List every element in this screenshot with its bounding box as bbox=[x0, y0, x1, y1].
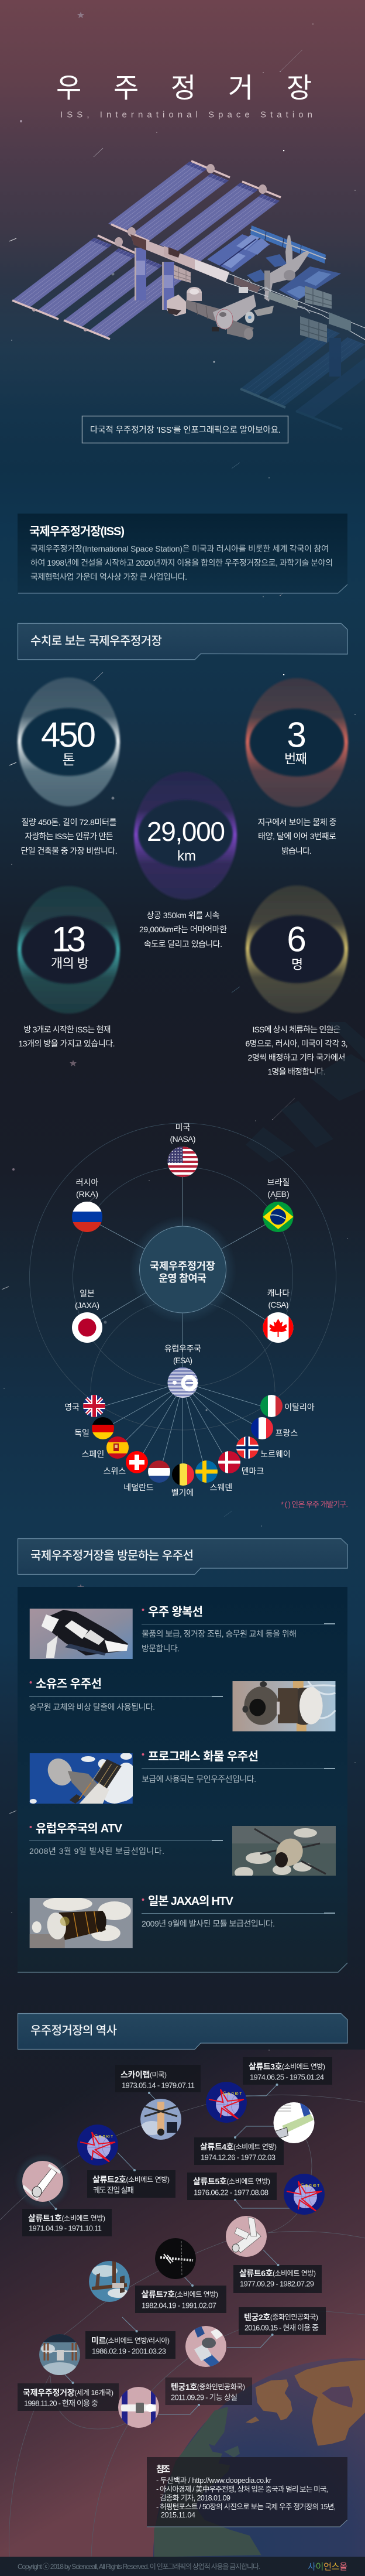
stat: 29,000 km: km bbox=[177, 848, 196, 864]
stat text: 450: 질량 450톤, 길이 72.8미터를 bbox=[21, 817, 117, 827]
stat text: 6: ISS에 상시 체류하는 인원은 bbox=[253, 1025, 341, 1034]
references list: 2015.11.04 bbox=[161, 2511, 195, 2519]
timeline node: Mir bbox=[85, 2261, 175, 2359]
timeline node: Tiangong 2: 텐궁2호(중화인민공화국) bbox=[244, 2312, 318, 2322]
stat text: 6 bbox=[246, 1025, 347, 1076]
agency: Russia: 러시아 bbox=[76, 1178, 98, 1187]
timeline node: Salyut 5: 1976.06.22 - 1977.08.08 bbox=[194, 2188, 268, 2197]
vertical radiators bbox=[135, 248, 174, 310]
stat: third brightest: 번째 bbox=[284, 752, 307, 766]
stat text: 13 bbox=[19, 1025, 115, 1048]
agency: Japan: 일본 bbox=[80, 1289, 95, 1298]
array support bars bbox=[12, 161, 281, 339]
diagram: participating countries bbox=[29, 1123, 348, 1508]
agency: Russia bbox=[72, 1178, 102, 1232]
agency: USA: 미국 bbox=[175, 1123, 190, 1132]
timeline node: Salyut 7 bbox=[135, 2238, 226, 2313]
radiator blocks bbox=[174, 265, 332, 343]
member: Denmark: 덴마크 bbox=[242, 1466, 264, 1476]
description: 2009년 9월에 발사된 모듈 보급선입니다. bbox=[142, 1919, 275, 1928]
stat text: 3: 지구에서 보이는 물체 중 bbox=[257, 817, 337, 827]
text block: 국제협력사업 가운데 역사상 가장 큰 사업입니다. bbox=[30, 572, 187, 581]
stat: 13 rooms: 개의 방 bbox=[51, 956, 89, 971]
member: Spain: 스페인 bbox=[82, 1449, 104, 1459]
centre node bbox=[129, 1216, 236, 1323]
member: UK bbox=[64, 1395, 105, 1417]
member: Italy bbox=[260, 1395, 315, 1417]
heading: stats bbox=[18, 623, 347, 659]
description: 승무원 교체와 비상 탈출에 사용됩니다. bbox=[29, 1702, 155, 1712]
copyright: Copyright ⓒ 2018 by Scienceall, All Rights Reserved. 이 인포그래픽의 상업적 사용을 금지합니다. bbox=[18, 2563, 260, 2571]
stat: 13 rooms: 13 bbox=[51, 919, 86, 959]
title bbox=[142, 1753, 144, 1756]
upper solar arrays bbox=[108, 162, 280, 263]
panel: spacecraft bbox=[18, 1587, 347, 1972]
member: Germany: 독일 bbox=[74, 1428, 89, 1438]
title bbox=[142, 1609, 144, 1611]
stat: 6 crew bbox=[246, 885, 348, 1013]
faint station silhouette bbox=[246, 1022, 365, 1162]
agency: Japan: (JAXA) bbox=[75, 1301, 99, 1310]
stat text: 29,000 bbox=[139, 911, 227, 949]
description: 보급에 사용되는 무인우주선입니다. bbox=[142, 1774, 256, 1784]
pressurised modules bbox=[167, 287, 274, 340]
timeline node: Salyut 1 bbox=[17, 2156, 112, 2236]
stat text: 6: 1명을 배정합니다. bbox=[268, 1067, 325, 1076]
timeline node: Salyut 7: 1982.04.19 - 1991.02.07 bbox=[142, 2301, 216, 2310]
heading: stats: 수치로 보는 국제우주정거장 bbox=[30, 634, 162, 648]
orbit rings bbox=[29, 1123, 336, 1430]
title: 우 bbox=[56, 73, 81, 103]
text block bbox=[30, 544, 333, 581]
heading: history: 우주정거장의 역사 bbox=[30, 2024, 117, 2037]
title bbox=[29, 1681, 32, 1684]
spacecraft row: Soyuz bbox=[29, 1677, 335, 1731]
heading: 국제우주정거장(ISS) bbox=[29, 525, 125, 538]
timeline node: Salyut 4 bbox=[194, 2102, 315, 2165]
references list: - 두산백과 / http://www.doopedia.co.kr bbox=[156, 2476, 271, 2485]
stat text: 29,000: 상공 350km 위를 시속 bbox=[146, 911, 220, 920]
stat text: 450: 자랑하는 ISS는 인류가 만든 bbox=[25, 832, 113, 841]
timeline node: Salyut 2: 궤도 진입 실패 bbox=[93, 2185, 134, 2195]
spacecraft row: Progress bbox=[30, 1750, 335, 1804]
stat: 6 crew: 6 bbox=[287, 919, 307, 959]
member: Belgium bbox=[171, 1463, 194, 1497]
timeline node: Salyut 5 bbox=[187, 2173, 325, 2215]
agency: Brazil: (AEB) bbox=[267, 1189, 290, 1199]
timeline node: Salyut 3: 살류트3호(소비에트 연방) bbox=[249, 2062, 325, 2071]
timeline orbits bbox=[0, 2095, 365, 2557]
timeline node: Salyut 3 bbox=[206, 2057, 332, 2123]
references list: - 허핑턴포스트 / 50장의 사진으로 보는 국제 우주 정거장의 15년, bbox=[156, 2503, 336, 2511]
timeline node: Mir: 미르(소비에트 연방/러시아) bbox=[91, 2336, 170, 2345]
centre node: 국제우주정거장 bbox=[150, 1260, 215, 1272]
member: Norway bbox=[236, 1436, 291, 1459]
timeline node: Tiangong 1: 2011.09.29 - 기능 상실 bbox=[171, 2393, 237, 2402]
member: Sweden bbox=[195, 1460, 232, 1492]
timeline node: ISS: 국제우주정거장(세계 16개국) bbox=[23, 2388, 113, 2397]
timeline node: Salyut 7: 살류트7호(소비에트 연방) bbox=[142, 2290, 218, 2299]
timeline node: Skylab: 스카이랩(미국) bbox=[120, 2070, 167, 2079]
timeline node: ISS bbox=[18, 2334, 119, 2411]
intro box: 다국적 우주정거장 'ISS'를 인포그래픽으로 알아보아요. bbox=[90, 425, 281, 435]
agency: Japan bbox=[72, 1289, 102, 1343]
timeline node: Tiangong 1: 텐궁1호(중화인민공화국) bbox=[171, 2382, 245, 2392]
stat: 29,000 km: 29,000 bbox=[147, 816, 225, 847]
title bbox=[29, 1826, 32, 1828]
stat: 29,000 km bbox=[134, 772, 237, 899]
member: France: 프랑스 bbox=[276, 1428, 298, 1438]
title bbox=[142, 1898, 144, 1901]
title: 정 bbox=[171, 73, 196, 103]
timeline node: Salyut 5: Салют bbox=[301, 2183, 319, 2188]
stat text: 29,000: 29,000km라는 어마어마한 bbox=[139, 925, 227, 934]
agency: Canada bbox=[263, 1288, 294, 1343]
member: Switzerland bbox=[104, 1451, 148, 1476]
timeline node: Salyut 2: 살류트2호(소비에트 연방) bbox=[92, 2175, 170, 2184]
spacecraft row: shuttle bbox=[30, 1605, 335, 1659]
spacecraft row: Progress: 프로그래스 화물 우주선 bbox=[148, 1750, 259, 1763]
panel: references bbox=[147, 2457, 347, 2527]
member: Italy: 이탈리아 bbox=[284, 1402, 315, 1412]
russian segment bbox=[264, 235, 310, 302]
blue solar panels bbox=[207, 225, 341, 300]
timeline node: Salyut 6: 살류트6호(소비에트 연방) bbox=[239, 2269, 316, 2278]
member: Norway: 노르웨이 bbox=[260, 1449, 291, 1459]
spacecraft row: ATV: 유럽우주국의 ATV bbox=[36, 1822, 123, 1835]
member: Denmark bbox=[218, 1451, 264, 1476]
member: Germany bbox=[74, 1417, 114, 1439]
timeline node: Salyut 4: 살류트4호(소비에트 연방) bbox=[200, 2142, 277, 2151]
text block: 국제우주정거장(International Space Station)은 미국과 러시아를 비롯한 세계 각국이 참여 bbox=[30, 544, 329, 553]
heading: visiting spacecraft: 국제우주정거장을 방문하는 우주선 bbox=[30, 1549, 194, 1562]
footer bbox=[0, 2557, 365, 2576]
heading: history bbox=[18, 2013, 347, 2050]
agency: Brazil bbox=[263, 1178, 294, 1232]
stat text: 6: 6명으로, 러시아, 미국이 각각 3, bbox=[246, 1039, 347, 1048]
timeline node: Tiangong 2: 2016.09.15 - 현재 이용 중 bbox=[245, 2324, 319, 2332]
footnote: * ( ) 안은 우주 개발기구. bbox=[281, 1500, 348, 1508]
stat: 13 rooms bbox=[18, 886, 120, 1014]
main truss bbox=[130, 234, 365, 340]
connector lines bbox=[99, 1176, 266, 1467]
references list bbox=[156, 2476, 336, 2519]
timeline node: Skylab bbox=[115, 2065, 201, 2140]
stat text: 6: 2명씩 배정하고 기타 국가에서 bbox=[248, 1053, 345, 1062]
stat: 450 tons bbox=[18, 678, 120, 806]
description: 물품의 보급, 정거장 조립, 승무원 교체 등을 위해 bbox=[142, 1629, 297, 1638]
subtitle: ISS, International Space Station bbox=[60, 110, 312, 119]
stat: third brightest: 3 bbox=[287, 716, 307, 754]
timeline node: Mir: 1986.02.19 - 2001.03.23 bbox=[92, 2347, 166, 2355]
stat text: 450 bbox=[21, 817, 117, 856]
member: UK: 영국 bbox=[64, 1402, 80, 1412]
description: 2008년 3월 9일 발사된 보급선입니다. bbox=[29, 1846, 164, 1856]
member: Spain bbox=[82, 1436, 129, 1459]
timeline node: Salyut 3: Салют bbox=[223, 2091, 242, 2096]
member: France bbox=[251, 1417, 298, 1439]
lower solar arrays bbox=[13, 238, 188, 337]
spacecraft row: HTV: 일본 JAXA의 HTV bbox=[148, 1894, 234, 1908]
references heading: 참조 bbox=[156, 2464, 170, 2475]
title: 주 bbox=[113, 73, 139, 103]
stat: 450 tons: 톤 bbox=[62, 752, 75, 768]
timeline node: Salyut 1: 1971.04.19 - 1971.10.11 bbox=[29, 2224, 102, 2232]
agency: Brazil: 브라질 bbox=[267, 1178, 290, 1187]
agency: ESA: (ESA) bbox=[173, 1356, 192, 1365]
centre node: 운영 참여국 bbox=[159, 1272, 206, 1284]
agency: ESA bbox=[164, 1344, 201, 1398]
text block: 하여 1998년에 건설을 시작하고 2020년까지 이용을 합의한 우주정거장으로, 과학기술 분야의 bbox=[30, 558, 333, 567]
stat text: 3: 밝습니다. bbox=[281, 846, 312, 856]
stat text: 3: 태양, 달에 이어 3번째로 bbox=[258, 832, 336, 841]
spacecraft row: HTV bbox=[30, 1894, 335, 1948]
title: 거 bbox=[228, 73, 253, 103]
panel: ISS definition bbox=[18, 514, 347, 593]
spacecraft row: ATV bbox=[29, 1822, 336, 1879]
member: Sweden: 스웨덴 bbox=[210, 1483, 232, 1492]
title: 장 bbox=[287, 73, 312, 103]
stat text: 29,000: 속도로 달리고 있습니다. bbox=[144, 939, 222, 949]
earth background bbox=[153, 2358, 365, 2557]
stat text: 450: 단일 건축물 중 가장 비쌉니다. bbox=[21, 846, 117, 856]
timeline node: Salyut 5: 살류트5호(소비에트 연방) bbox=[193, 2177, 270, 2186]
spacecraft row: shuttle: 방문합니다. bbox=[142, 1644, 180, 1653]
stat text: 13: 방 3개로 시작한 ISS는 현재 bbox=[23, 1025, 111, 1034]
timeline node: Salyut 2 bbox=[77, 2125, 175, 2198]
timeline node: Tiangong 1 bbox=[118, 2377, 252, 2428]
timeline node: Salyut 4: 1974.12.26 - 1977.02.03 bbox=[201, 2153, 276, 2162]
member: Netherlands bbox=[123, 1460, 170, 1492]
member: Switzerland: 스위스 bbox=[104, 1466, 126, 1476]
references list: - 아시아경제 / 美中우주전쟁, 상처 입은 중국과 멀리 보는 미국, bbox=[156, 2485, 328, 2493]
timeline node: Salyut 3: 1974.06.25 - 1975.01.24 bbox=[250, 2073, 324, 2081]
stat: 450 tons: 450 bbox=[41, 716, 96, 754]
timeline node: ISS: 1998.11.20 - 현재 이용 중 bbox=[24, 2399, 98, 2408]
references list: 김종화 기자, 2018.01.09 bbox=[160, 2494, 230, 2502]
timeline node: Salyut 6: 1977.09.29 - 1982.07.29 bbox=[240, 2279, 314, 2288]
agency: Canada: (CSA) bbox=[268, 1300, 289, 1309]
stat: third brightest bbox=[246, 678, 348, 807]
agency: USA: (NASA) bbox=[170, 1134, 195, 1144]
member: Netherlands: 네덜란드 bbox=[123, 1483, 154, 1492]
logo: 사이언스올 bbox=[308, 2561, 347, 2572]
heading: visiting spacecraft bbox=[18, 1539, 347, 1574]
timeline node: Skylab: 1973.05.14 - 1979.07.11 bbox=[122, 2081, 195, 2089]
agency: Canada: 캐나다 bbox=[267, 1288, 290, 1298]
agency: USA bbox=[167, 1123, 198, 1177]
spacecraft row: Soyuz: 소유즈 우주선 bbox=[36, 1677, 102, 1691]
timeline node: Salyut 1: 살류트1호(소비에트 연방) bbox=[28, 2214, 105, 2223]
illustration: space station bbox=[12, 161, 365, 429]
timeline node: Salyut 2: Салют bbox=[94, 2134, 113, 2139]
stat text: 3 bbox=[257, 817, 337, 856]
title bbox=[56, 73, 312, 103]
timeline node: Salyut 6 bbox=[226, 2216, 322, 2293]
spacecraft row: shuttle: 우주 왕복선 bbox=[148, 1605, 203, 1619]
stat text: 13: 13개의 방을 가지고 있습니다. bbox=[19, 1039, 115, 1048]
agency: Russia: (RKA) bbox=[76, 1189, 98, 1199]
stat: 6 crew: 명 bbox=[291, 957, 303, 972]
ghost reflection of station bbox=[240, 326, 365, 429]
member: Belgium: 벨기에 bbox=[171, 1488, 194, 1497]
intro box bbox=[82, 416, 288, 443]
timeline node: Tiangong 2 bbox=[185, 2307, 326, 2368]
agency: ESA: 유럽우주국 bbox=[164, 1344, 201, 1353]
